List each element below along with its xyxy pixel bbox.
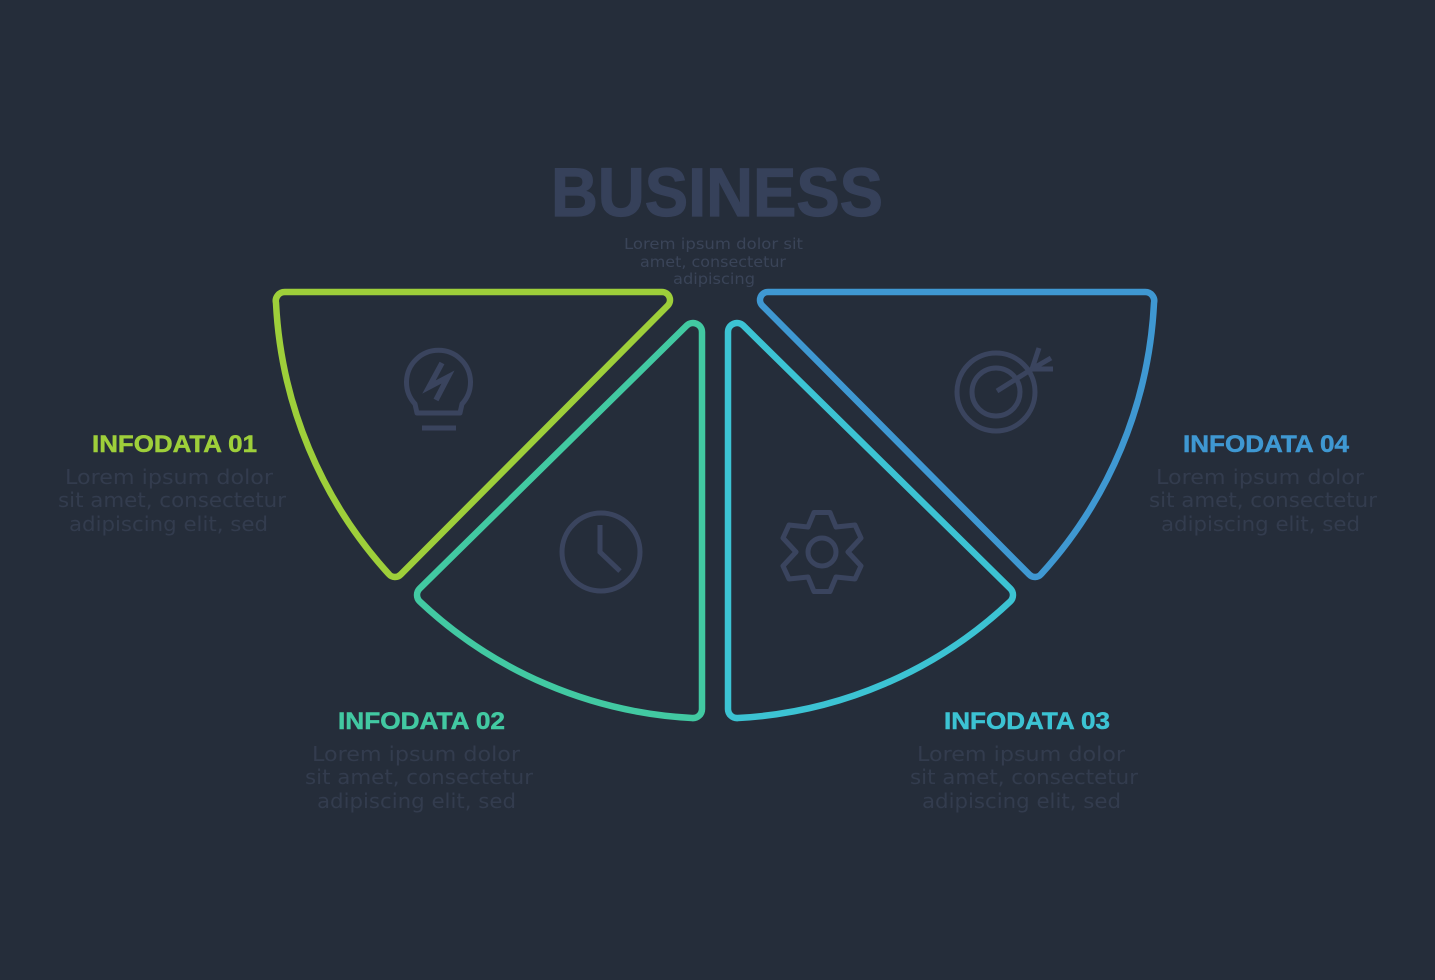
icon: target with arrow	[957, 348, 1053, 431]
label: infodata 04: Lorem ipsum dolor	[1156, 465, 1365, 489]
label: infodata 01: adipiscing elit, sed	[69, 512, 268, 536]
subtitle text block: amet, consectetur	[640, 253, 787, 271]
label: infodata 02: adipiscing elit, sed	[317, 789, 516, 813]
label: infodata 03: Lorem ipsum dolor	[917, 742, 1126, 766]
label: infodata 03	[910, 708, 1139, 813]
label: infodata 04: INFODATA 04	[1183, 431, 1350, 458]
icon: clock	[562, 513, 640, 591]
icon: light bulb	[406, 350, 470, 428]
label: infodata 04	[1149, 431, 1378, 536]
label: infodata 04: adipiscing elit, sed	[1161, 512, 1360, 536]
subtitle text block	[624, 235, 803, 288]
label: infodata 03: sit amet, consectetur	[910, 765, 1139, 789]
subtitle text block: adipiscing	[673, 270, 755, 288]
label: infodata 02	[305, 708, 534, 813]
label: infodata 03: INFODATA 03	[944, 708, 1110, 735]
label: infodata 04: sit amet, consectetur	[1149, 488, 1378, 512]
label: infodata 02: INFODATA 02	[338, 708, 505, 735]
label: infodata 01: sit amet, consectetur	[58, 488, 287, 512]
label: infodata 02: Lorem ipsum dolor	[312, 742, 521, 766]
icon: gear	[783, 512, 861, 592]
label: infodata 01	[58, 431, 287, 536]
label: infodata 03: adipiscing elit, sed	[922, 789, 1121, 813]
panel: teal segment 02	[417, 323, 702, 718]
title: BUSINESS	[551, 154, 883, 231]
label: infodata 01: Lorem ipsum dolor	[65, 465, 274, 489]
label: infodata 01: INFODATA 01	[92, 431, 257, 458]
subtitle text block: Lorem ipsum dolor sit	[624, 235, 803, 253]
panel: green segment 01	[276, 292, 670, 577]
label: infodata 02: sit amet, consectetur	[305, 765, 534, 789]
panel: blue segment 04	[760, 292, 1154, 577]
panel: cyan segment 03	[728, 323, 1013, 718]
